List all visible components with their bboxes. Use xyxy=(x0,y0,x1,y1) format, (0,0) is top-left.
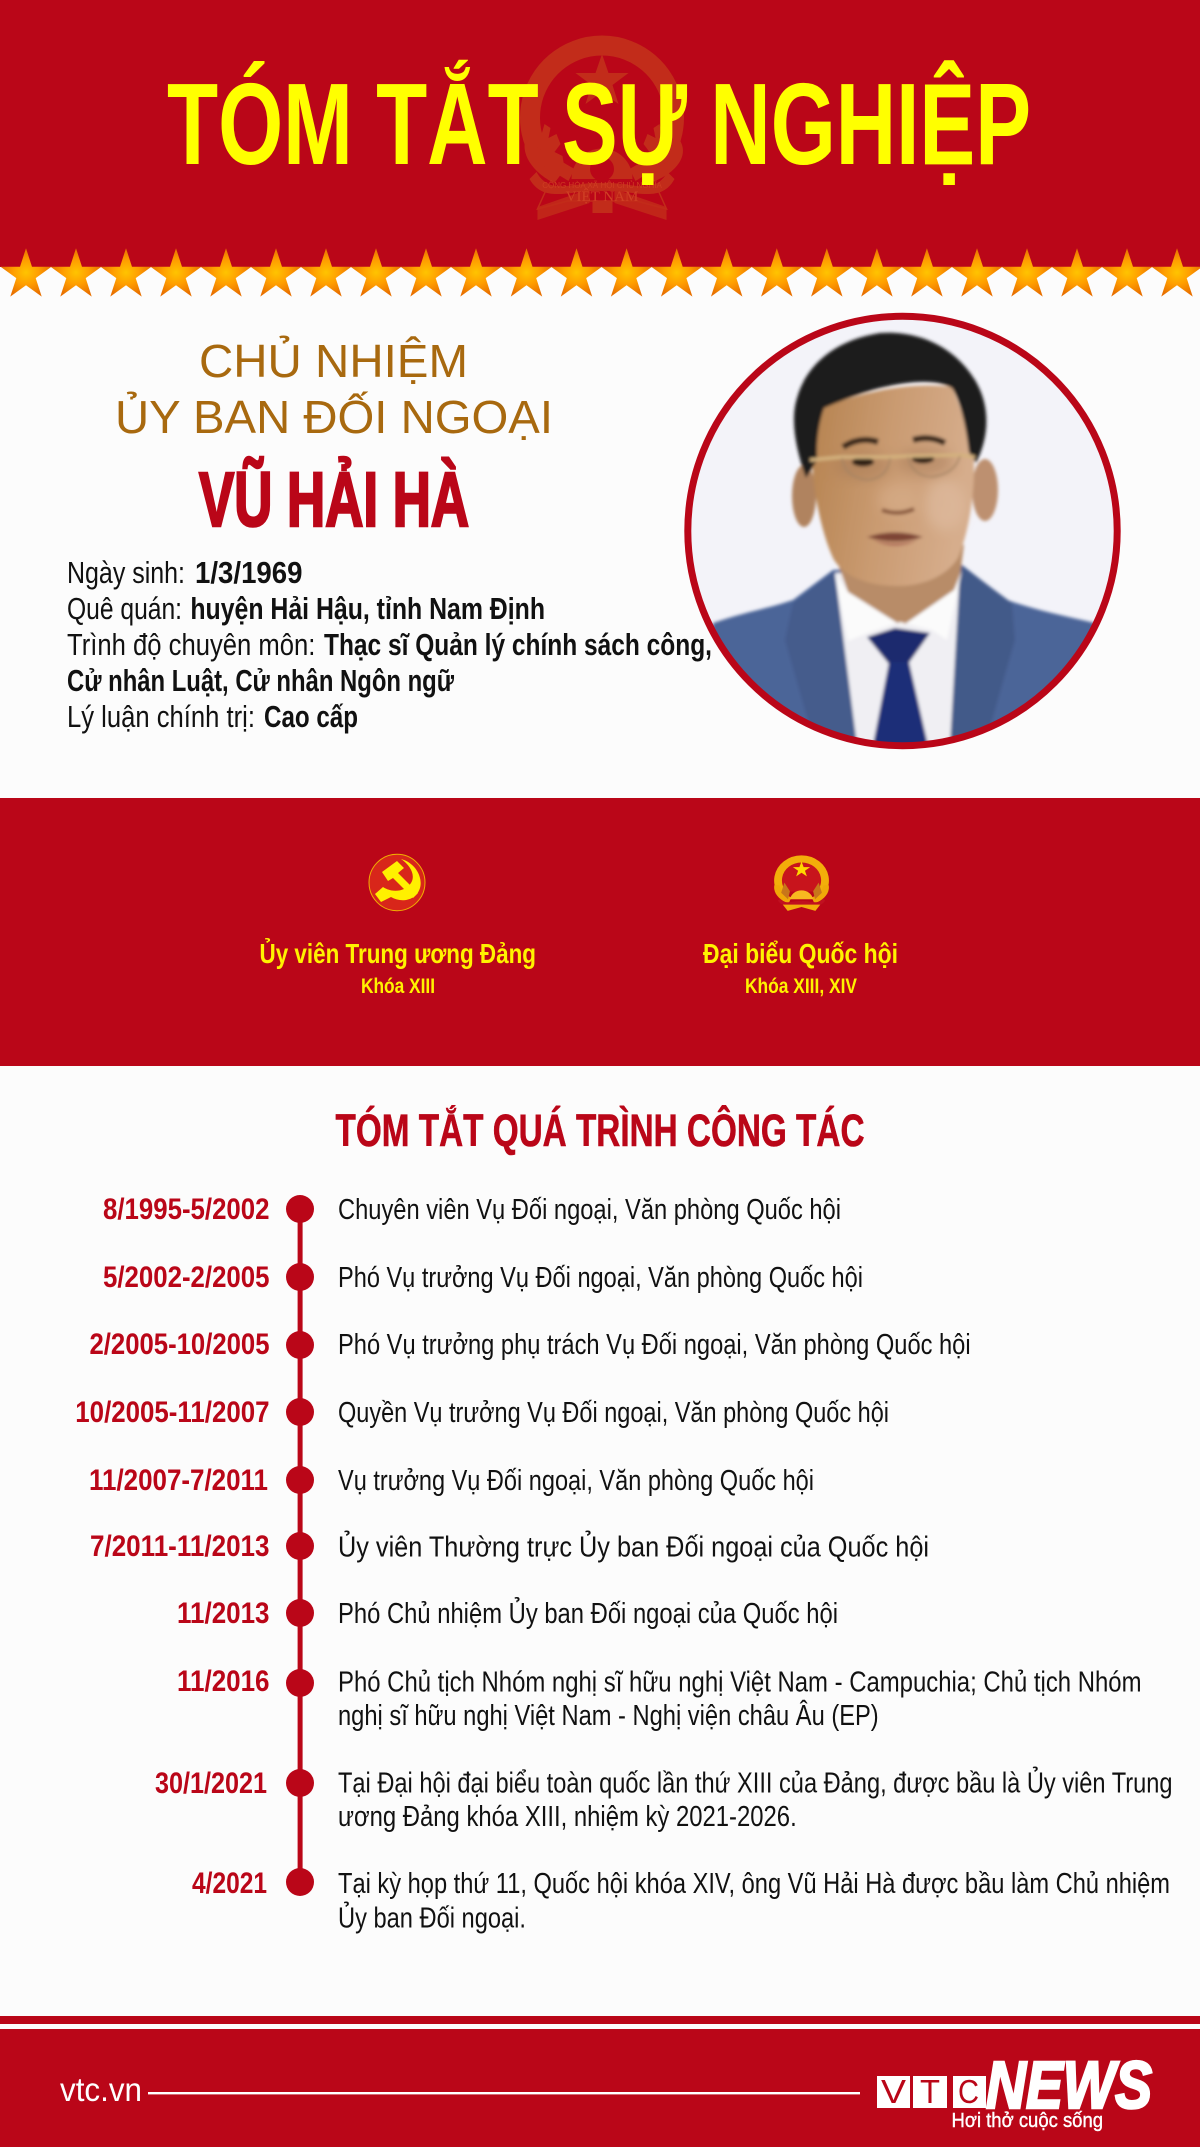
portrait photo xyxy=(688,316,1120,760)
label: national assembly deputy xyxy=(703,938,898,998)
biography facts: Thạc sĩ Quản lý chính sách công, xyxy=(324,627,712,662)
cheek highlight xyxy=(924,480,962,530)
hair xyxy=(794,333,986,478)
biography facts: Cao cấp xyxy=(264,699,358,734)
nose xyxy=(881,487,908,510)
panel: header banner xyxy=(0,0,1200,267)
name: VŨ HẢI HÀ xyxy=(199,456,469,543)
timeline descriptions: Quyền Vụ trưởng Vụ Đối ngoại, Văn phòng Quốc hội xyxy=(338,1397,889,1429)
portrait ring xyxy=(688,316,1117,746)
logo: VTC News: Hơi thở cuộc sống xyxy=(952,2110,1103,2132)
timeline dates xyxy=(75,1193,270,1900)
timeline dates: 4/2021 xyxy=(192,1867,267,1900)
footer line xyxy=(148,2092,860,2094)
timeline dates: 11/2016 xyxy=(177,1665,270,1698)
eyes xyxy=(852,458,874,466)
panel: positions xyxy=(0,798,1200,1066)
collar xyxy=(835,570,962,641)
logo: VTC News: V xyxy=(881,2073,906,2110)
timeline dates: 30/1/2021 xyxy=(155,1767,267,1800)
timeline axis xyxy=(298,1209,303,1882)
timeline dates: 11/2013 xyxy=(177,1597,270,1630)
icon: watermark national emblem xyxy=(525,46,683,220)
footer rule xyxy=(0,2016,1200,2024)
label: national assembly deputy: Đại biểu Quốc hội xyxy=(703,938,898,969)
timeline xyxy=(75,1193,1172,1934)
timeline dates: 10/2005-11/2007 xyxy=(75,1396,270,1429)
eye shadow xyxy=(841,460,886,478)
timeline descriptions: Ủy viên Thường trực Ủy ban Đối ngoại của Quốc hội xyxy=(338,1530,929,1564)
biography facts: 1/3/1969 xyxy=(195,555,302,590)
ears xyxy=(792,465,816,527)
timeline dates: 5/2002-2/2005 xyxy=(103,1261,270,1294)
timeline descriptions xyxy=(338,1194,1172,1934)
timeline dates: 2/2005-10/2005 xyxy=(90,1328,270,1361)
timeline descriptions: Phó Vụ trưởng phụ trách Vụ Đối ngoại, Văn phòng Quốc hội xyxy=(338,1329,971,1361)
timeline dates: 7/2011-11/2013 xyxy=(90,1530,270,1563)
timeline descriptions: ương Đảng khóa XIII, nhiệm kỳ 2021-2026. xyxy=(338,1801,797,1833)
timeline descriptions: nghị sĩ hữu nghị Việt Nam - Nghị viện châu Âu (EP) xyxy=(338,1699,879,1732)
face xyxy=(812,385,974,586)
biography facts: huyện Hải Hậu, tỉnh Nam Định xyxy=(190,591,545,626)
suit xyxy=(712,564,1094,724)
biography facts: Quê quán: xyxy=(67,591,182,626)
mouth xyxy=(867,532,923,542)
biography facts: Cử nhân Luật, Cử nhân Ngôn ngữ xyxy=(67,663,454,698)
timeline dates: 11/2007-7/2011 xyxy=(89,1464,268,1497)
icon: watermark national emblem: CỘNG HÒA XÃ HỘI CHỦ NGHĨA xyxy=(542,181,662,190)
glasses xyxy=(810,455,975,460)
timeline descriptions: Phó Vụ trưởng Vụ Đối ngoại, Văn phòng Quốc hội xyxy=(338,1262,863,1294)
biography facts: Lý luận chính trị: xyxy=(67,699,255,734)
website label: vtc.vn xyxy=(60,2071,142,2108)
timeline descriptions: Ủy ban Đối ngoại. xyxy=(338,1900,526,1934)
icon: hammer and sickle xyxy=(369,854,425,911)
label: national assembly deputy: Khóa XIII, XIV xyxy=(745,974,858,998)
timeline dates: 8/1995-5/2002 xyxy=(103,1193,270,1226)
logo: VTC News xyxy=(877,2048,1152,2132)
shirt xyxy=(835,570,960,745)
label: party central committee: Ủy viên Trung ương Đảng xyxy=(260,937,536,969)
position title xyxy=(115,335,553,443)
biography facts: Ngày sinh: xyxy=(67,555,185,590)
timeline descriptions: Phó Chủ nhiệm Ủy ban Đối ngoại của Quốc hội xyxy=(338,1596,838,1630)
panel: footer xyxy=(0,2029,1200,2147)
tie xyxy=(867,628,930,664)
brows xyxy=(843,440,878,447)
heading: work history: TÓM TẮT QUÁ TRÌNH CÔNG TÁC xyxy=(336,1105,864,1156)
neck xyxy=(833,545,964,626)
biography facts: Trình độ chuyên môn: xyxy=(67,627,315,662)
logo: VTC News: NEWS xyxy=(986,2048,1152,2123)
panel: profile xyxy=(67,316,1120,760)
timeline descriptions: Chuyên viên Vụ Đối ngoại, Văn phòng Quốc hội xyxy=(338,1194,841,1226)
icon: watermark national emblem: VIỆT NAM xyxy=(566,188,638,205)
label: party central committee xyxy=(260,937,536,998)
position title: ỦY BAN ĐỐI NGOẠI xyxy=(115,391,553,443)
label: party central committee: Khóa XIII xyxy=(361,974,435,998)
logo: VTC News: T xyxy=(920,2073,940,2110)
position title: CHỦ NHIỆM xyxy=(199,335,468,387)
row of stars xyxy=(1,248,1200,297)
icon: national emblem xyxy=(774,859,829,911)
timeline dots xyxy=(286,1195,314,1896)
timeline descriptions: Vụ trưởng Vụ Đối ngoại, Văn phòng Quốc hội xyxy=(338,1465,814,1497)
biography facts xyxy=(67,555,712,734)
logo: VTC News: C xyxy=(958,2073,979,2110)
